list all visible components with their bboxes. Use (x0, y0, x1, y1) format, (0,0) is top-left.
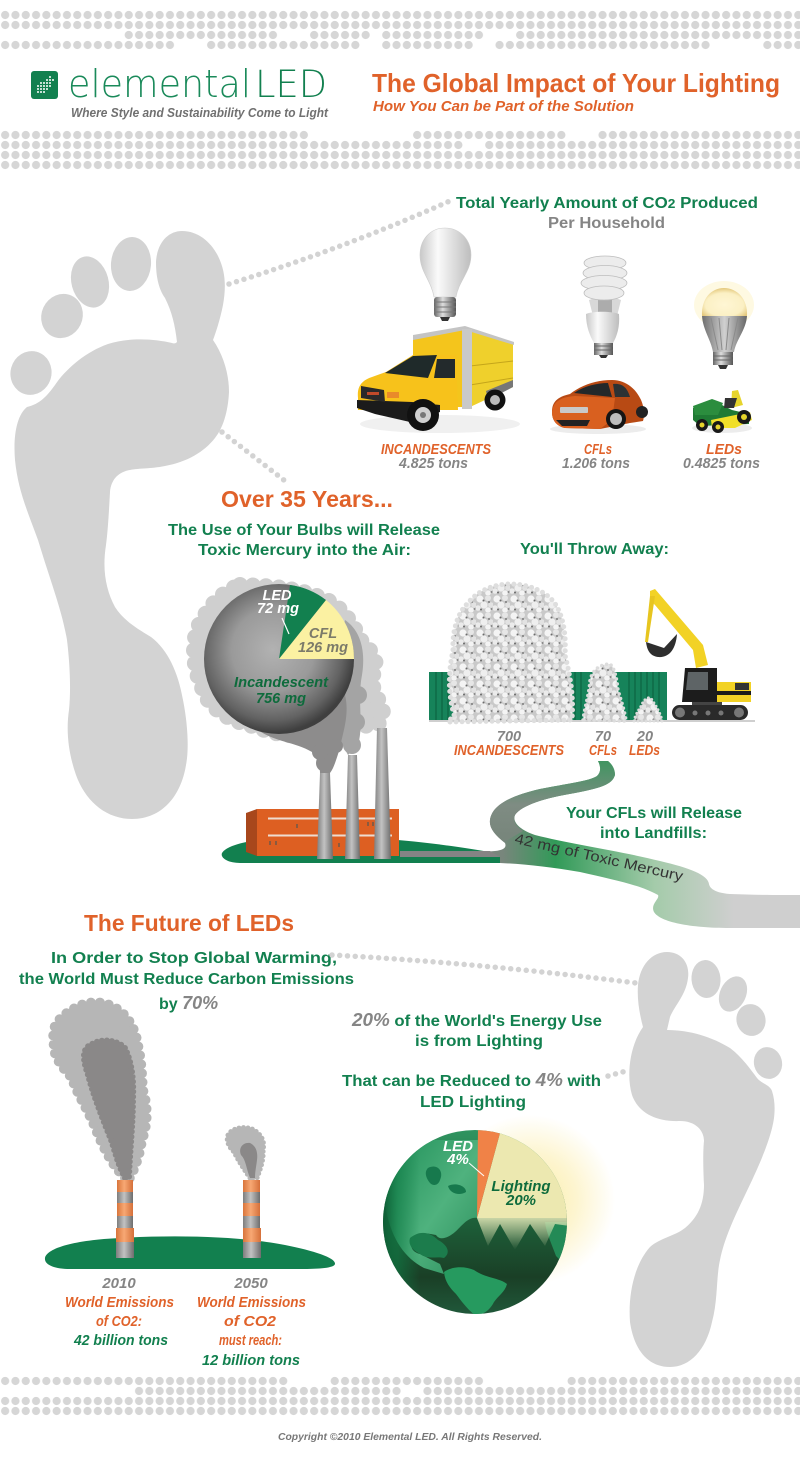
pie slice: CFL (279, 600, 354, 659)
copyright: Copyright ©2010 Elemental LED. All Rights Reserved. (278, 1431, 542, 1443)
leader line (282, 618, 289, 634)
label: 20 LEDs: LEDs (629, 743, 660, 759)
label: Incandescent 756 mg: Incandescent (234, 675, 329, 691)
smokestacks (317, 728, 391, 859)
label: CFLs tons: 1.206 tons (562, 456, 630, 472)
smoke clouds above factory (194, 585, 383, 773)
text: 20% of energy use: is from Lighting (415, 1033, 543, 1050)
label: incandescents tons: 4.825 tons (398, 456, 468, 472)
label: Incandescent 756 mg: 756 mg (256, 691, 306, 707)
label: 2010 emissions: 42 billion tons (73, 1333, 168, 1349)
dotted connector: foot to CO2 heading (229, 200, 452, 284)
heading: The Future of LEDs: The Future of LEDs (84, 910, 294, 936)
glow around globe (445, 1115, 615, 1285)
label: 2050 emissions: World Emissions (197, 1295, 306, 1311)
label: 2010 emissions (65, 1275, 174, 1349)
logo icon (31, 71, 58, 99)
text: toxic mercury into the air (168, 522, 440, 559)
label: LEDs tons: 0.4825 tons (683, 456, 760, 472)
pie slice: LED (279, 585, 326, 659)
label: 2010 emissions: of CO2: (96, 1314, 142, 1330)
pie slice: LED (477, 1130, 500, 1218)
label: Lighting 20%: 20% (505, 1192, 536, 1209)
icon: box truck (357, 326, 520, 433)
text: CFLs release into landfills (566, 805, 742, 842)
heading: total yearly CO2 (456, 195, 758, 232)
text: reduced to 4%: That can be Reduced to 4% with (342, 1070, 601, 1090)
label: 2050 emissions: must reach: (219, 1333, 282, 1349)
label: incandescents tons (381, 442, 491, 472)
text: CFLs release into landfills: Your CFLs will Release (566, 805, 742, 822)
dotted connector: LED text to right foot (608, 1071, 626, 1076)
label: Lighting 20%: Lighting (491, 1178, 551, 1195)
dotted connector: foot to Over 35 Years (222, 432, 289, 484)
label: LEDs tons (683, 442, 760, 472)
label: 2050 emissions: 2050 (233, 1275, 268, 1292)
icon: LED bulb (694, 281, 754, 369)
label: 2010 emissions: World Emissions (65, 1295, 174, 1311)
label: 2050 emissions: 12 billion tons (202, 1353, 300, 1369)
title: The Global Impact of Your Lighting (372, 68, 780, 98)
label: LED 72 mg: LED (262, 588, 292, 604)
text: stop global warming: by 70% (159, 993, 218, 1013)
label: CFL 126 mg: CFL (309, 626, 337, 642)
label: 70 CFLs (589, 729, 617, 759)
header lower dot band (0, 130, 800, 170)
river: mercury into landfill (400, 761, 800, 928)
subtitle: How You Can be Part of the Solution (373, 98, 634, 115)
text: CFLs release into landfills: into Landfills: (600, 825, 707, 842)
footer dot band (0, 1376, 800, 1416)
label: LED 4%: 4% (446, 1151, 469, 1168)
river label: 42 mg of Toxic Mercury (513, 831, 685, 885)
pie slice: lighting (477, 1133, 570, 1218)
dotted connector: emissions to right foot (332, 955, 636, 983)
label: 20 LEDs: 20 (636, 729, 653, 745)
continents (385, 1140, 570, 1316)
icon: excavator (645, 589, 751, 720)
text: reduced to 4% (342, 1070, 601, 1111)
heading: total yearly CO2: Total Yearly Amount of CO 2 Produced (456, 195, 758, 212)
label: CFLs tons (562, 442, 630, 472)
factory ground (222, 837, 495, 863)
label: 2010 emissions: 2010 (101, 1275, 136, 1292)
text: stop global warming: the World Must Reduce Carbon Emissions (19, 971, 354, 988)
label: 70 CFLs: 70 (595, 729, 611, 745)
top dot band (0, 10, 800, 50)
label: LED 72 mg: 72 mg (257, 601, 299, 617)
text: reduced to 4%: LED Lighting (420, 1094, 526, 1111)
text: stop global warming (19, 950, 354, 1013)
label: 70 CFLs: CFLs (589, 743, 617, 759)
label: 700 incandescents: 700 (497, 729, 521, 745)
label: 20 LEDs (629, 729, 660, 759)
label: LED 4%: LED (443, 1138, 473, 1155)
label: LEDs tons: LEDs (706, 442, 742, 458)
text: toxic mercury into the air: The Use of Your Bulbs will Release (168, 522, 440, 539)
factory building (246, 809, 399, 856)
icon: orange car (550, 380, 648, 434)
label: 700 incandescents: INCANDESCENTS (454, 743, 564, 759)
chimney 2050 (243, 1180, 261, 1258)
emissions ground (45, 1236, 335, 1269)
heading: Over 35 Years: Over 35 Years... (221, 486, 393, 512)
smoke 2010 (53, 1002, 147, 1178)
smoke 2050 (227, 1128, 264, 1178)
right footprint (629, 952, 786, 1367)
leader line (469, 1163, 484, 1176)
label: incandescents tons: INCANDESCENTS (381, 442, 491, 458)
label: Incandescent 756 mg (234, 675, 329, 707)
label: CFLs tons: CFLs (584, 442, 612, 458)
text: 20% of energy use (351, 1010, 602, 1050)
logo: elemental LED (31, 62, 329, 120)
heading: total yearly CO2: Per Household (548, 215, 665, 232)
text: toxic mercury into the air: Toxic Mercury into the Air: (198, 542, 411, 559)
icon: riding mower (692, 390, 752, 433)
label: CFL 126 mg (298, 626, 348, 656)
logo wordmark: elemental (68, 62, 251, 106)
text: 20% of energy use: 20% of the World's Energy Use (351, 1010, 602, 1030)
label: 700 incandescents (454, 729, 564, 759)
mercury pie chart (204, 584, 354, 734)
logo wordmark: LED (255, 63, 327, 106)
globe pie chart (383, 1128, 570, 1316)
label: 2050 emissions (197, 1275, 306, 1369)
shipping container (429, 672, 755, 722)
label: LED 4% (443, 1138, 473, 1168)
icon: CFL bulb (581, 256, 627, 358)
label: 2050 emissions: of CO2 (224, 1314, 276, 1330)
label: LED 72 mg (257, 588, 299, 617)
left footprint (6, 231, 229, 819)
sun rays (477, 1218, 570, 1250)
heading: You'll Throw Away: You'll Throw Away: (520, 541, 669, 558)
icon: incandescent bulb (420, 228, 471, 321)
tagline: Where Style and Sustainability Come to Light (71, 106, 329, 120)
label: CFL 126 mg: 126 mg (298, 640, 348, 656)
chimney 2010 (116, 1180, 134, 1258)
pile: 20 LEDs (634, 698, 662, 721)
text: stop global warming: In Order to Stop Global Warming, (51, 950, 337, 967)
label: Lighting 20% (491, 1178, 551, 1209)
pile: 700 incandescents (448, 584, 573, 722)
pile: 70 CFLs (583, 664, 626, 721)
